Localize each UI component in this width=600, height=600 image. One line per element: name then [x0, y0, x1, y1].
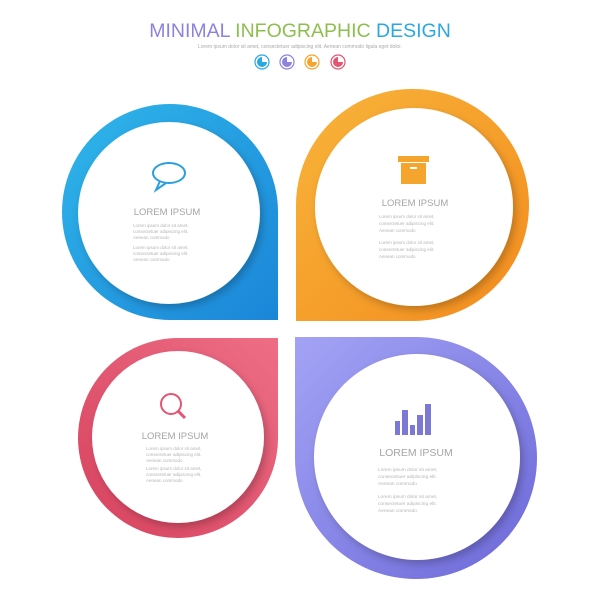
panel: purple: consectetuer adipiscing elit.: [378, 501, 437, 507]
icon: magnifier: [161, 394, 185, 418]
panel: orange: Lorem ipsum dolor sit amet,: [379, 214, 435, 219]
panel: pink: Lorem ipsum dolor sit amet,: [146, 446, 202, 451]
panel: pink: LOREM IPSUM: [142, 431, 208, 442]
panel: blue: consectetuer adipiscing elit.: [133, 229, 188, 234]
panel: orange: consectetuer adipiscing elit.: [379, 247, 434, 252]
panel: purple: [295, 337, 537, 579]
icon: speech bubble: [153, 163, 185, 190]
panel: blue: Lorem ipsum dolor sit amet,: [133, 245, 189, 250]
panel: purple: Aenean commodo: [378, 481, 417, 487]
panel: purple: Lorem ipsum dolor sit amet,: [378, 494, 437, 500]
panel: blue: [62, 104, 278, 320]
panel: orange: [296, 89, 529, 321]
subtitle: Lorem ipsum dolor sit amet, consectetuer adipiscing elit. Aenean commodo ligula eget dolor.: [198, 44, 402, 50]
icon: bar chart: [395, 404, 431, 435]
panel: blue: consectetuer adipiscing elit.: [133, 251, 188, 256]
panel: pink: [78, 338, 278, 538]
panel: purple: Lorem ipsum dolor sit amet,: [378, 467, 437, 473]
panel: pink: Aenean commodo: [146, 458, 183, 463]
legend dots: [255, 55, 345, 69]
panel: orange: Aenean commodo: [379, 228, 416, 233]
icon: box: [398, 156, 429, 184]
panel: orange: consectetuer adipiscing elit.: [379, 221, 434, 226]
panel: purple: Aenean commodo: [378, 508, 417, 514]
panel: blue: LOREM IPSUM: [134, 207, 200, 218]
panel: pink: consectetuer adipiscing elit.: [146, 452, 201, 457]
panel: orange: Lorem ipsum dolor sit amet,: [379, 240, 435, 245]
panel: blue: Aenean commodo: [133, 257, 170, 262]
panel: orange: LOREM IPSUM: [382, 198, 448, 209]
panel: blue: Lorem ipsum dolor sit amet,: [133, 223, 189, 228]
panel: pink: consectetuer adipiscing elit.: [146, 472, 201, 477]
panel: pink: Aenean commodo: [146, 478, 183, 483]
panel: purple: LOREM IPSUM: [379, 447, 453, 459]
panel: pink: Lorem ipsum dolor sit amet,: [146, 466, 202, 471]
title: MINIMAL INFOGRAPHIC DESIGN: [149, 20, 451, 42]
panel: purple: consectetuer adipiscing elit.: [378, 474, 437, 480]
panel: blue: Aenean commodo: [133, 235, 170, 240]
panel: orange: Aenean commodo: [379, 254, 416, 259]
